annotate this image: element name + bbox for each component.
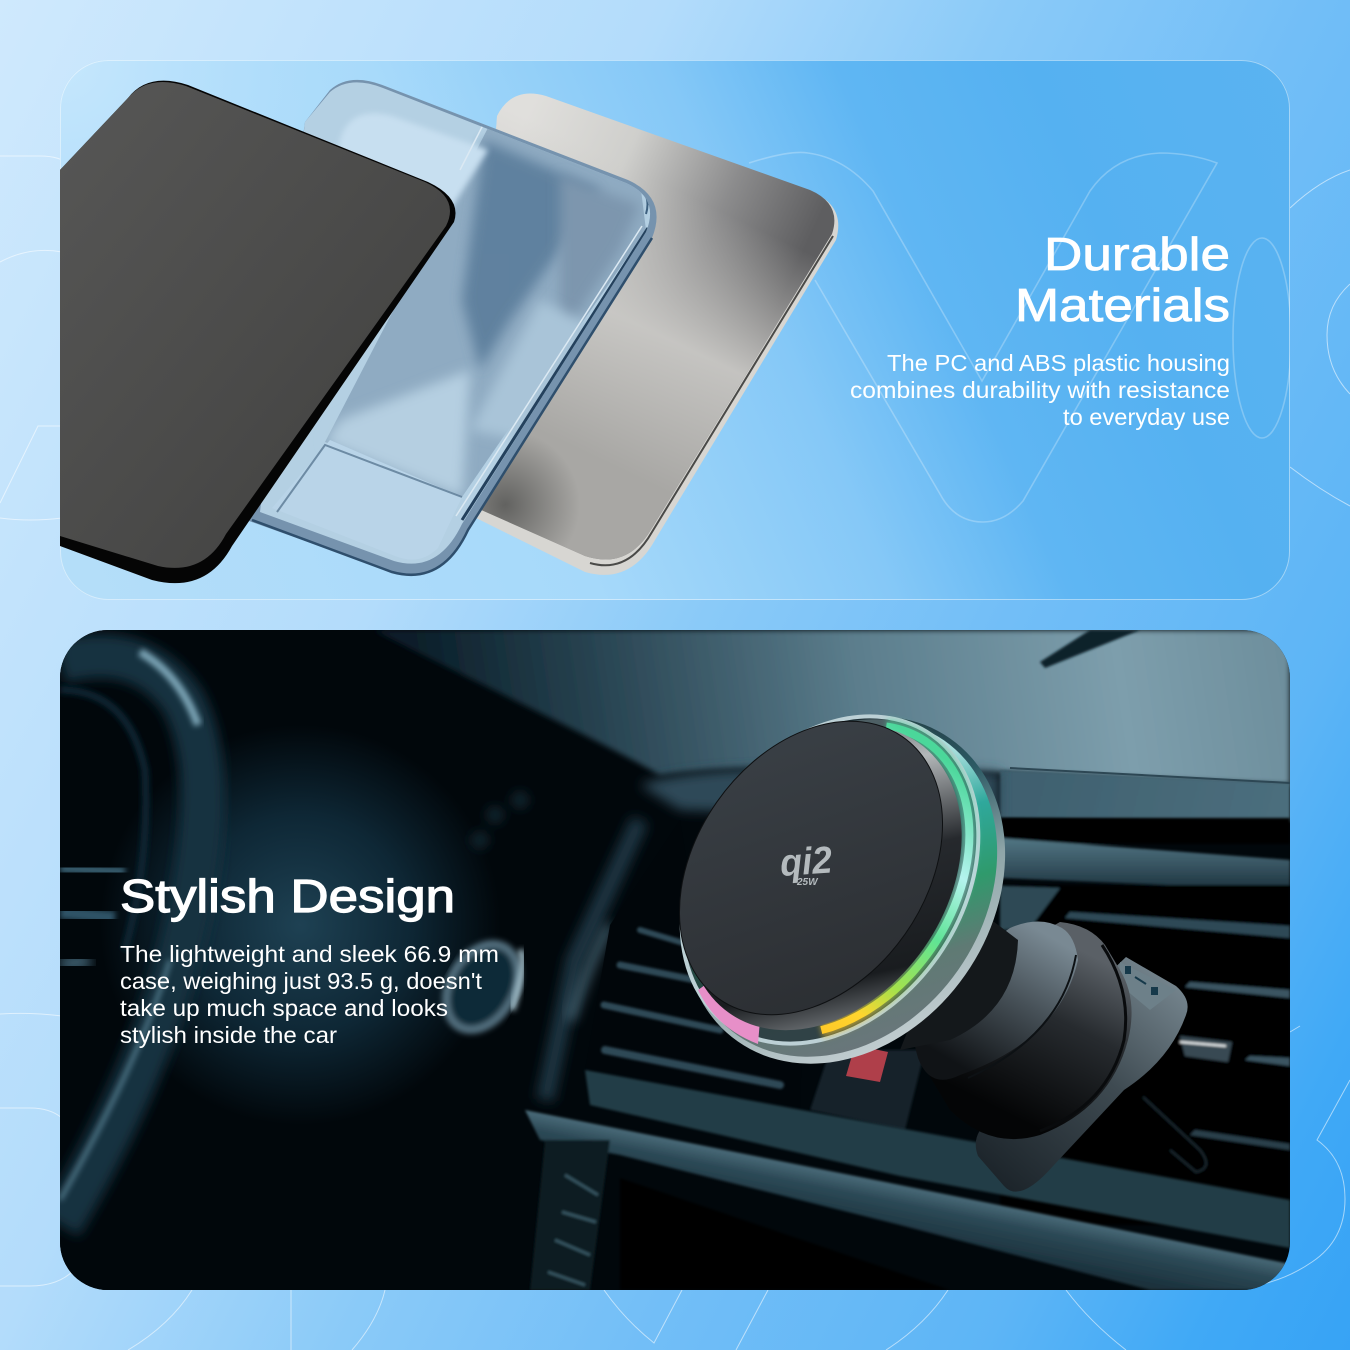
product: transparent plate	[249, 70, 670, 580]
text: stylish design description: stylish inside the car	[120, 1022, 337, 1048]
heading: stylish design: Stylish Design	[120, 870, 455, 922]
heading: durable materials: Durable	[1044, 228, 1230, 280]
lower console strips	[525, 1070, 1290, 1290]
text: stylish design description: The lightweight and sleek 66.9 mm	[120, 941, 499, 967]
panel: stylish design	[60, 630, 1290, 1290]
stem	[900, 915, 1018, 1050]
text: stylish design description: take up much space and looks	[120, 995, 448, 1021]
dark bevel	[629, 673, 1019, 1083]
product: black matte plate	[60, 81, 456, 583]
product: magnetic phone charger	[617, 654, 1188, 1192]
text: durable materials description: combines durability with resistance	[850, 377, 1230, 403]
base plate	[976, 957, 1188, 1192]
product: brushed metal plate	[477, 94, 838, 575]
heading: durable materials	[1015, 228, 1230, 331]
icon: qi2 25W logo: 25W	[796, 877, 819, 888]
heading: durable materials: Materials	[1015, 279, 1230, 331]
air vents left	[602, 918, 618, 968]
text: stylish design description: case, weighing just 93.5 g, doesn't	[120, 968, 483, 994]
text: durable materials description	[850, 350, 1230, 430]
air vents right	[1000, 818, 1290, 1225]
icon: lock indicator	[1126, 967, 1157, 994]
led light ring	[620, 659, 1040, 1101]
panel: durable materials	[60, 60, 1291, 600]
pink light segment	[698, 985, 760, 1044]
cup body	[916, 922, 1132, 1139]
dashboard top	[374, 630, 1290, 785]
glass dome	[617, 654, 1071, 1126]
hazard button	[810, 1050, 925, 1130]
text: durable materials description: to everyday use	[1063, 404, 1230, 430]
dash button	[438, 936, 526, 1038]
icon: qi2 25W logo: qi2	[779, 839, 834, 885]
text: durable materials description: The PC and ABS plastic housing	[887, 350, 1230, 376]
steering wheel	[60, 656, 203, 1225]
car interior scene	[60, 630, 1290, 1290]
text: stylish design description	[120, 941, 499, 1048]
charging face	[625, 671, 997, 1065]
